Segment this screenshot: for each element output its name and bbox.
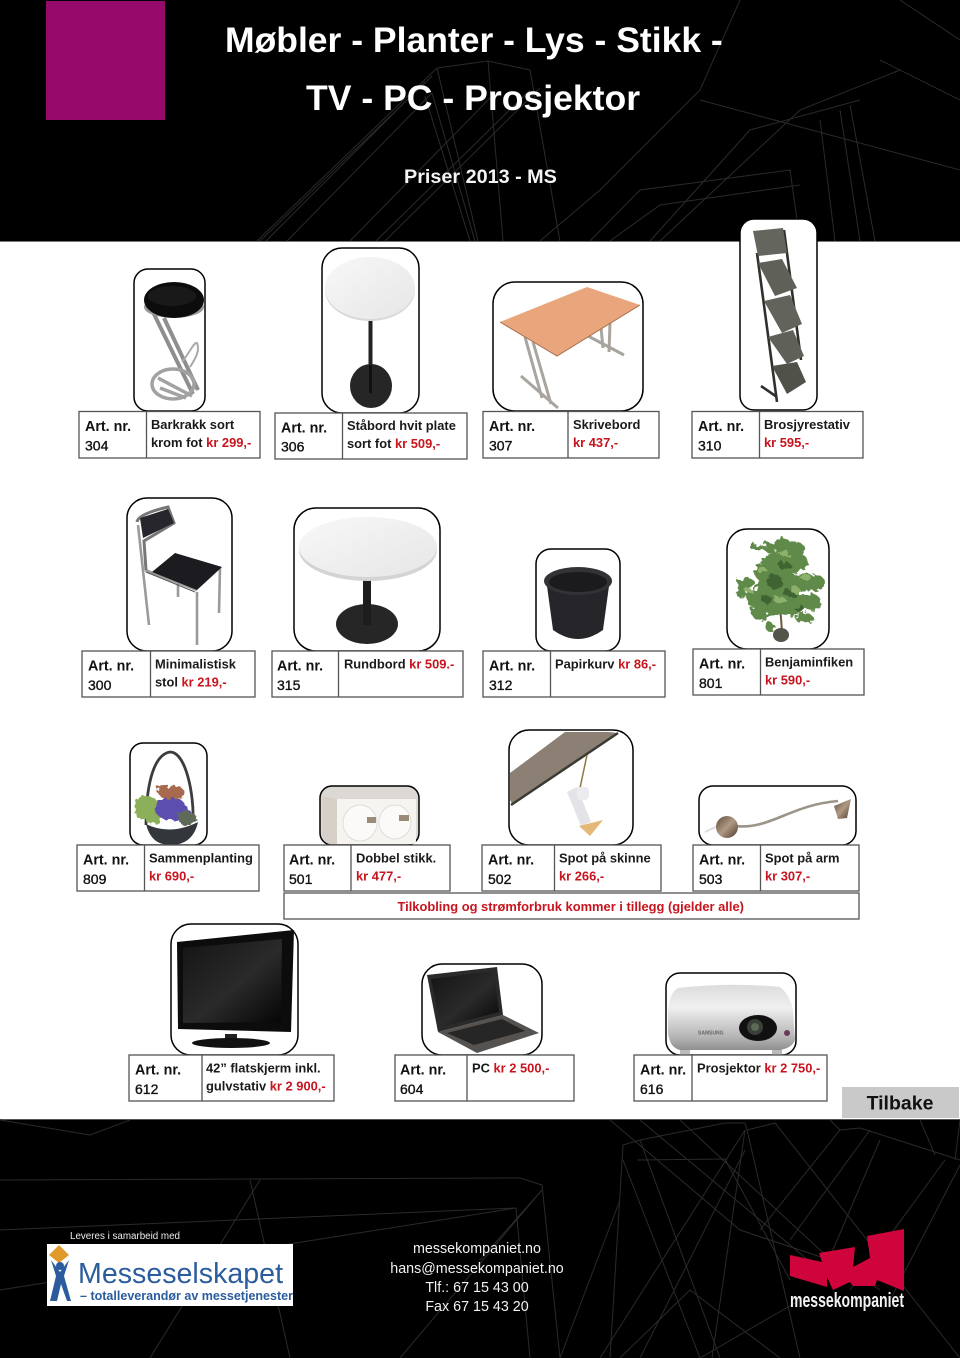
label table: Dobbel stikk. xyxy=(356,850,436,866)
partner caption: Leveres i samarbeid med xyxy=(70,1231,180,1242)
label table: 306 xyxy=(281,438,305,454)
label table xyxy=(693,649,864,695)
label table: sort fot kr 509,- xyxy=(347,436,440,451)
label table: 312 xyxy=(489,677,513,693)
label table: Art. nr. xyxy=(400,1062,446,1078)
label table: Art. nr. xyxy=(489,658,535,674)
partner logo: Messeselskapet: – totalleverandør av messetjenester xyxy=(80,1288,293,1303)
label table xyxy=(483,412,659,458)
label table: Art. nr. xyxy=(699,852,745,868)
label table: kr 307,- xyxy=(765,868,810,884)
label table: kr 690,- xyxy=(149,868,194,884)
product: skrivebord 307 xyxy=(483,282,659,458)
image frame: desk xyxy=(493,282,643,411)
partner logo: Messeselskapet xyxy=(47,1244,293,1306)
label table: Brosjyrestativ xyxy=(764,417,851,432)
product: rundbord 315 xyxy=(272,508,463,697)
label table xyxy=(284,845,450,891)
product: brosjyrestativ 310 xyxy=(692,219,863,458)
image frame: waste bin xyxy=(536,549,620,651)
image frame: arm spot xyxy=(699,786,856,845)
label table: kr 437,- xyxy=(573,435,618,450)
label table: 307 xyxy=(489,438,513,454)
notice: connection fees: Tilkobling og strømforbruk kommer i tillegg (gjelder alle) xyxy=(398,899,744,914)
product: spot på skinne 502 xyxy=(482,730,661,891)
label table: gulvstativ kr 2 900,- xyxy=(206,1078,326,1094)
label table xyxy=(77,845,259,891)
label table: 616 xyxy=(640,1081,664,1097)
label table xyxy=(275,413,467,459)
label table: Art. nr. xyxy=(277,658,323,674)
label table xyxy=(693,845,859,891)
label table: Skrivebord xyxy=(573,417,640,432)
image frame: projector xyxy=(666,973,796,1055)
label table: 809 xyxy=(83,871,107,887)
label table: PC kr 2 500,- xyxy=(472,1060,549,1076)
title: Møbler - Planter - Lys - Stikk - xyxy=(225,20,723,60)
product: stol 300 xyxy=(82,498,255,697)
partner logo: Messeselskapet: Messeselskapet xyxy=(78,1258,283,1290)
label table xyxy=(272,651,463,697)
contact details: Tlf.: 67 15 43 00 xyxy=(425,1280,529,1296)
label table: 503 xyxy=(699,871,723,887)
label table: Papirkurv kr 86,- xyxy=(555,656,656,672)
label table: kr 266,- xyxy=(559,868,604,884)
title: TV - PC - Prosjektor xyxy=(306,78,640,118)
image frame: chair xyxy=(127,498,232,651)
product: PC 604 xyxy=(395,964,574,1101)
label table: Prosjektor kr 2 750,- xyxy=(697,1060,820,1076)
label table: krom fot kr 299,- xyxy=(151,435,251,450)
product: spot på arm 503 xyxy=(693,786,859,891)
label table: Sammenplanting xyxy=(149,850,253,866)
notice: connection fees xyxy=(284,893,859,919)
label table xyxy=(129,1055,334,1101)
label table: 304 xyxy=(85,438,109,454)
product: benjaminfiken 801 xyxy=(693,529,864,695)
image frame: laptop xyxy=(422,964,542,1055)
label table xyxy=(82,651,255,697)
image frame: bar stool xyxy=(134,269,205,411)
product: flatskjerm 612 xyxy=(129,924,334,1101)
image frame: brochure rack xyxy=(740,219,817,410)
product: barkrakk 304 xyxy=(79,269,260,458)
magenta square xyxy=(46,1,165,120)
label table: 801 xyxy=(699,675,723,691)
label table: 502 xyxy=(488,871,512,887)
label table: Ståbord hvit plate xyxy=(347,418,456,433)
label table: Rundbord kr 509.- xyxy=(344,656,454,672)
image frame: television xyxy=(171,924,298,1055)
label table: Art. nr. xyxy=(88,658,134,674)
logo: messekompaniet: messekompaniet xyxy=(790,1290,904,1312)
label table: Art. nr. xyxy=(135,1062,181,1078)
back button: Tilbake xyxy=(867,1092,934,1114)
image frame: plant xyxy=(727,529,829,649)
label table: 604 xyxy=(400,1081,424,1097)
label table: 310 xyxy=(698,438,722,454)
product: sammenplanting 809 xyxy=(77,743,259,891)
label table: Art. nr. xyxy=(698,419,744,435)
contact details: messekompaniet.no xyxy=(413,1241,541,1257)
label table xyxy=(79,412,260,458)
product: ståbord 306 xyxy=(275,248,467,459)
image frame: double socket xyxy=(320,786,419,845)
label table: Art. nr. xyxy=(289,852,335,868)
subtitle: Priser 2013 - MS xyxy=(404,166,557,188)
label table: 501 xyxy=(289,871,313,887)
label table xyxy=(634,1055,827,1101)
label table: Minimalistisk xyxy=(155,656,237,672)
label table: Art. nr. xyxy=(640,1062,686,1078)
title xyxy=(225,20,723,118)
label table: Art. nr. xyxy=(699,656,745,672)
image frame: rail spot xyxy=(509,730,633,845)
label table: stol kr 219,- xyxy=(155,674,227,690)
label table xyxy=(483,651,665,697)
label table: kr 595,- xyxy=(764,435,809,450)
label table: kr 590,- xyxy=(765,672,810,688)
label table: Spot på arm xyxy=(765,850,840,866)
label table: 315 xyxy=(277,677,301,693)
label table xyxy=(692,412,863,458)
label table xyxy=(482,845,661,891)
image frame: flower basket xyxy=(130,743,207,845)
logo: messekompaniet xyxy=(790,1229,904,1312)
label table: Art. nr. xyxy=(281,420,327,436)
label table: Benjaminfiken xyxy=(765,654,853,670)
contact details xyxy=(390,1241,564,1315)
label table: Art. nr. xyxy=(489,419,535,435)
contact details: Fax 67 15 43 20 xyxy=(425,1299,529,1315)
label table: kr 477,- xyxy=(356,868,401,884)
image frame: standing table xyxy=(322,248,419,413)
label table: Spot på skinne xyxy=(559,850,651,866)
contact details: hans@messekompaniet.no xyxy=(390,1261,564,1277)
image frame: round table xyxy=(294,508,440,651)
label table: Art. nr. xyxy=(83,852,129,868)
label table: Art. nr. xyxy=(85,419,131,435)
label table: 300 xyxy=(88,677,112,693)
product: prosjektor 616 xyxy=(634,973,827,1101)
label table: 612 xyxy=(135,1081,159,1097)
image frame: projector: SAMSUNG xyxy=(698,1030,724,1036)
label table xyxy=(395,1055,574,1101)
label table: Barkrakk sort xyxy=(151,417,235,432)
label table: 42” flatskjerm inkl. xyxy=(206,1060,321,1076)
product: dobbel stikk 501 xyxy=(284,786,450,891)
label table: Art. nr. xyxy=(488,852,534,868)
product: papirkurv 312 xyxy=(483,549,665,697)
back button xyxy=(842,1087,959,1118)
